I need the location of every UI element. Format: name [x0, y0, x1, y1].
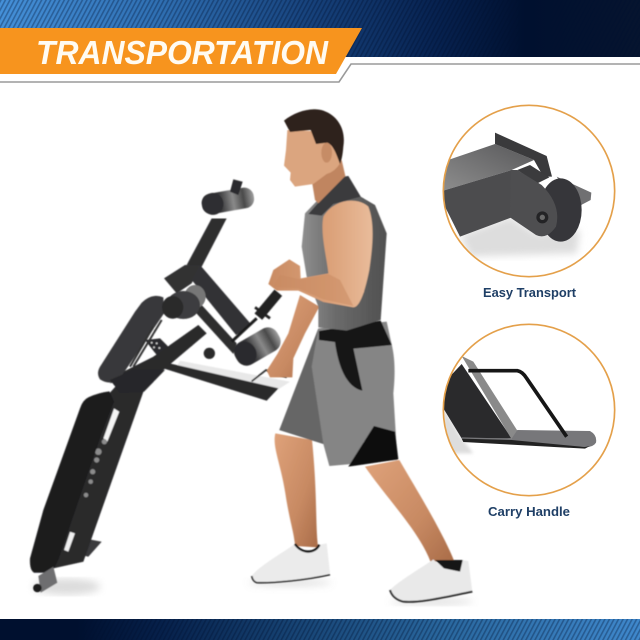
shorts [279, 321, 398, 467]
detail circle: easy transport [443, 105, 615, 277]
waistband [319, 321, 392, 391]
label: easy transport: Easy Transport [483, 285, 577, 300]
front leg [275, 433, 318, 547]
title: TRANSPORTATION [36, 34, 329, 71]
shoe shadows [248, 580, 473, 604]
pivot roller [162, 285, 206, 319]
label: carry handle: Carry Handle [488, 504, 570, 519]
transport wheel [33, 584, 42, 592]
ring [443, 324, 615, 496]
man [248, 109, 473, 604]
upper frame [110, 325, 207, 383]
top roller [200, 186, 256, 217]
title banner [0, 28, 362, 74]
detail circle: carry handle [443, 324, 615, 496]
top bracket [230, 179, 243, 195]
kick stand [75, 538, 102, 557]
seat frame [110, 370, 165, 393]
footer band [0, 619, 640, 640]
front shoe [252, 543, 330, 583]
upper pad [98, 296, 164, 383]
rear shoe [390, 559, 472, 602]
middle arm [192, 265, 252, 335]
lower frame rail [52, 383, 144, 568]
knob [204, 348, 215, 359]
shirt [302, 176, 387, 331]
foot plate [38, 567, 57, 593]
floor shadow [33, 579, 100, 595]
hair [284, 109, 344, 164]
caster photo [443, 133, 591, 257]
lower back pad [30, 391, 114, 573]
adjust plate [145, 338, 168, 355]
lower arm [193, 305, 237, 354]
grip handle [232, 293, 278, 342]
upper arm [187, 218, 227, 267]
forearm shade [273, 274, 353, 306]
carry base [163, 363, 278, 401]
support strut [130, 320, 162, 367]
header rule [0, 64, 640, 82]
near arm [267, 295, 319, 377]
neck [312, 160, 345, 203]
handle photo [443, 356, 596, 453]
adjustment pins [84, 439, 107, 497]
carry handle [252, 370, 287, 381]
bench [30, 179, 290, 595]
carry base strip [177, 361, 290, 389]
header band [0, 0, 640, 57]
cross plate [164, 265, 200, 293]
head [284, 109, 344, 187]
shorts hem panel [348, 426, 398, 467]
flexed arm [268, 201, 373, 307]
lower roller [230, 323, 285, 370]
ring [443, 105, 615, 277]
rear leg [365, 460, 454, 562]
frame slots [64, 408, 119, 552]
